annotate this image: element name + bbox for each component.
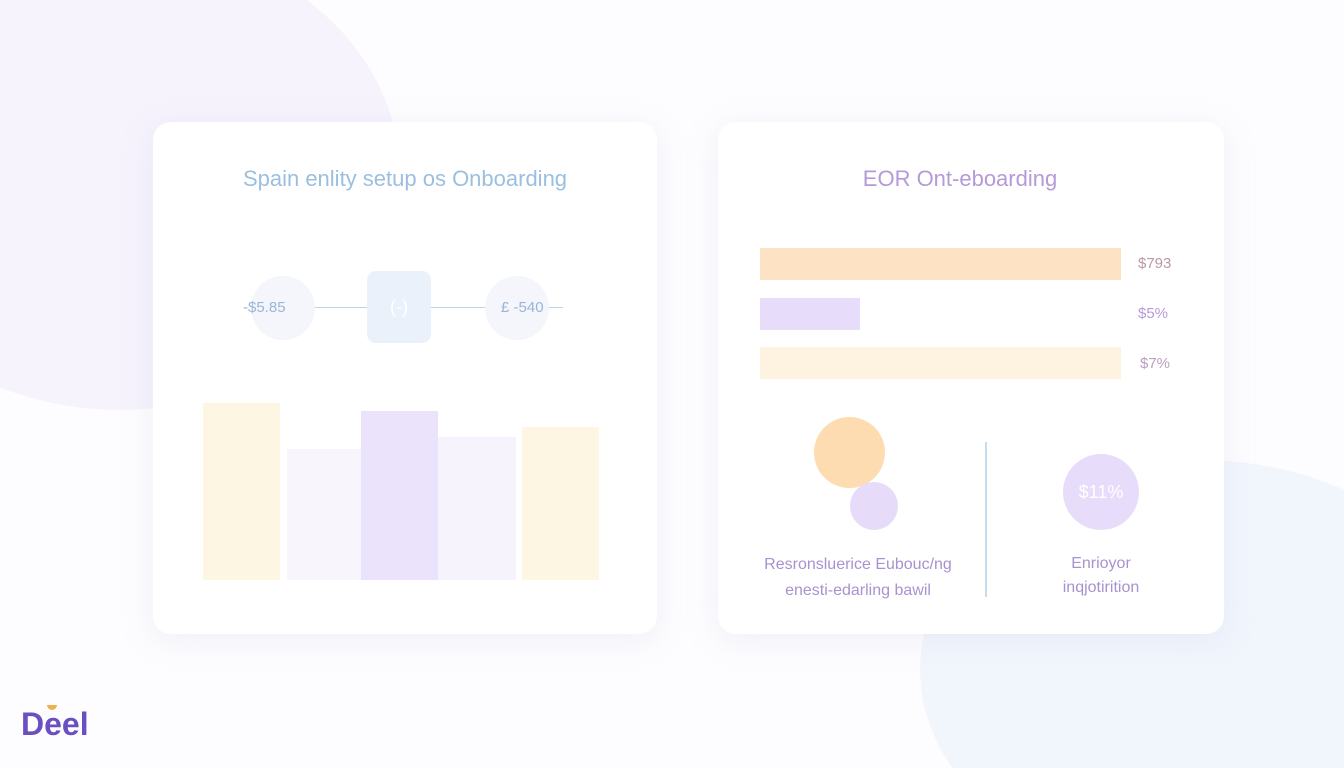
panel: entity setup — [153, 122, 657, 634]
horizontal bars — [760, 248, 1171, 379]
logo: Deel: Deel — [21, 706, 89, 742]
node: center box — [367, 271, 431, 343]
caption left — [764, 556, 952, 599]
horizontal bars: $793 — [1138, 255, 1171, 272]
divider — [985, 442, 987, 597]
stat circle: $11% — [1079, 482, 1123, 502]
horizontal bars: $5% — [1138, 305, 1168, 322]
stat circle — [1063, 454, 1139, 530]
node: left value: -$5.85 — [243, 299, 286, 316]
caption right — [1063, 555, 1139, 596]
panel: EOR — [718, 122, 1224, 634]
horizontal bars: $7% — [1140, 355, 1170, 372]
flow diagram — [243, 271, 563, 343]
caption left: Resronsluerice Eubouc/ng — [764, 556, 952, 573]
caption left: enesti-edarling bawil — [785, 582, 931, 599]
heading left: Spain enlity setup os Onboarding — [243, 166, 567, 191]
node: center box: (-) — [390, 297, 408, 317]
heading right: EOR Ont-eboarding — [863, 166, 1057, 191]
caption right: Enrioyor — [1071, 555, 1131, 572]
caption right: inqjotirition — [1063, 579, 1139, 596]
node: right value: £ -540 — [501, 299, 544, 316]
bar chart left — [203, 403, 599, 580]
circles illustration — [814, 417, 898, 530]
